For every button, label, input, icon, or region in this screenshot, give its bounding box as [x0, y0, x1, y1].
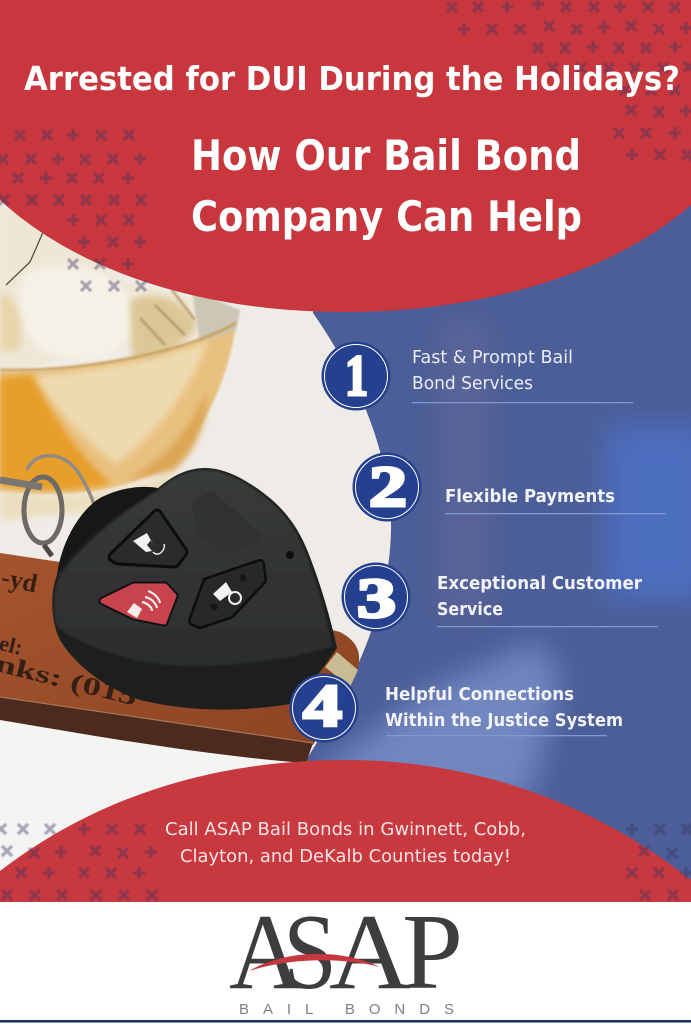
- title: main heading: Company Can Help: [191, 192, 582, 241]
- ASAP Bail Bonds logo: [229, 893, 463, 1018]
- step 3 label: Exceptional Customer: [437, 573, 642, 594]
- number badge 1: 1: [345, 343, 368, 408]
- number badge 2: 2: [369, 454, 407, 519]
- step 3: [342, 562, 658, 632]
- ASAP Bail Bonds logo: P: [402, 893, 463, 1012]
- call to action text: Clayton, and DeKalb Counties today!: [180, 846, 511, 867]
- step 1 label: Fast & Prompt Bail: [412, 347, 573, 368]
- number badge 3: 3: [357, 568, 396, 630]
- call to action text: Call ASAP Bail Bonds in Gwinnett, Cobb,: [165, 819, 526, 840]
- ASAP Bail Bonds logo: A: [329, 893, 411, 1012]
- number badge 3: [342, 562, 410, 632]
- fob top-left button: [113, 514, 183, 563]
- fob red panic button: [103, 586, 174, 622]
- number badge 1: [322, 342, 390, 410]
- step 4 label: Within the Justice System: [385, 710, 623, 731]
- footer navy line: [0, 1020, 691, 1022]
- step 4: [290, 673, 623, 742]
- top red banner: [0, 0, 691, 312]
- title: main heading: [191, 131, 582, 241]
- photo: whisky glass: [0, 205, 240, 520]
- blue panel: [300, 200, 691, 902]
- cross pattern: bottom right: [626, 823, 691, 900]
- key rings: [0, 456, 98, 556]
- fob icons: [133, 533, 154, 552]
- step 2: [352, 452, 666, 522]
- step 2 label: Flexible Payments: [445, 486, 615, 507]
- number badge 2: [352, 452, 422, 522]
- key fob: [52, 468, 358, 710]
- step 1: [322, 342, 633, 410]
- cross pattern: top right: [447, 0, 691, 161]
- cross pattern: top left: [0, 129, 146, 291]
- title: main heading: How Our Bail Bond: [191, 131, 581, 180]
- photo background: [0, 190, 691, 902]
- step 4 label: Helpful Connections: [385, 684, 574, 705]
- cross pattern: bottom left: [0, 823, 157, 900]
- ASAP Bail Bonds logo: S: [283, 893, 337, 1012]
- leather key tag: [0, 553, 359, 763]
- ASAP Bail Bonds logo: A: [229, 893, 303, 1012]
- number badge 4: 4: [303, 673, 342, 739]
- number badge 4: [290, 673, 358, 742]
- footer white band: [0, 902, 691, 1024]
- ASAP Bail Bonds logo: BAIL BONDS: [239, 1001, 454, 1018]
- step 1 label: Bond Services: [412, 373, 533, 394]
- step 3 label: Service: [437, 599, 503, 620]
- logo red swoosh: [249, 954, 380, 971]
- fob lock button: [193, 564, 262, 624]
- fob blank button: [196, 496, 257, 550]
- bottom red banner: [0, 760, 691, 902]
